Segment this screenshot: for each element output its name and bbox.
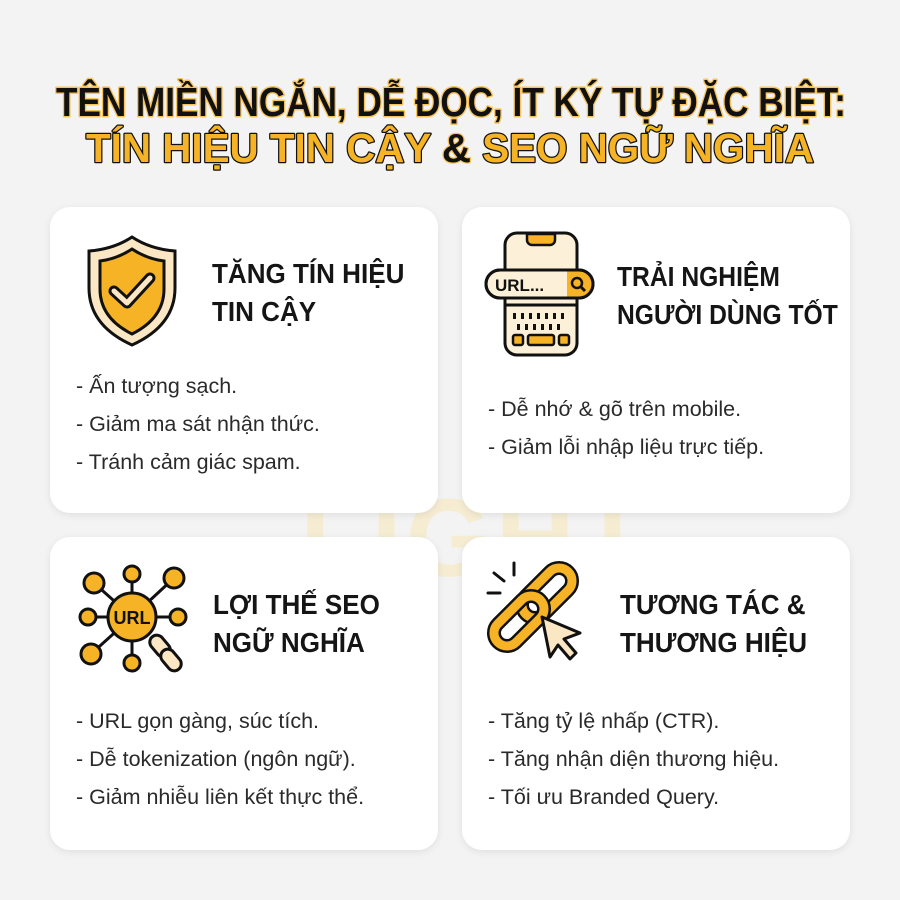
- icon: phone: URL...: [495, 276, 544, 295]
- watermark: LIGHT: [300, 477, 650, 600]
- icon: shield: [88, 235, 176, 347]
- bullets: - Ấn tượng sạch.: [76, 374, 237, 398]
- bullets: - Tránh cảm giác spam.: [76, 450, 301, 474]
- icon: URL network: URL: [114, 608, 150, 628]
- bullets: - Giảm lỗi nhập liệu trực tiếp.: [488, 435, 764, 459]
- panel: trust: [50, 207, 438, 513]
- heading: NGƯỜI DÙNG TỐT: [617, 299, 838, 330]
- bullets: - Tăng nhận diện thương hiệu.: [488, 747, 779, 771]
- heading: TRẢI NGHIỆM: [617, 261, 780, 292]
- heading: NGỮ NGHĨA: [213, 627, 365, 658]
- heading: LỢI THẾ SEO: [213, 589, 380, 620]
- heading: [617, 261, 838, 330]
- heading: [213, 589, 380, 658]
- panel: UX: [462, 207, 850, 513]
- heading: TĂNG TÍN HIỆU: [212, 258, 404, 289]
- bullets: - Giảm nhiễu liên kết thực thể.: [76, 785, 364, 809]
- heading: [212, 258, 404, 327]
- icon: phone: [484, 232, 594, 356]
- bullets: - Giảm ma sát nhận thức.: [76, 412, 320, 436]
- title: TÍN HIỆU TIN CẬY & SEO NGỮ NGHĨA: [86, 125, 814, 171]
- bullets: - URL gọn gàng, súc tích.: [76, 709, 319, 733]
- bullets: - Dễ nhớ & gõ trên mobile.: [488, 397, 741, 421]
- panel: SEO: [50, 537, 438, 850]
- title: [55, 78, 846, 171]
- bullets: - Tối ưu Branded Query.: [488, 785, 719, 809]
- bullets: [76, 709, 364, 809]
- bullets: [76, 374, 320, 474]
- bullets: [488, 397, 764, 459]
- heading: THƯƠNG HIỆU: [620, 627, 807, 658]
- icon: chain & cursor: [486, 561, 582, 661]
- heading: TƯƠNG TÁC &: [620, 589, 806, 620]
- heading: TIN CẬY: [212, 296, 316, 327]
- bullets: - Tăng tỷ lệ nhấp (CTR).: [488, 709, 719, 733]
- bullets: - Dễ tokenization (ngôn ngữ).: [76, 747, 356, 771]
- heading: [620, 589, 807, 658]
- icon: URL network: [78, 564, 188, 672]
- panel: engagement: [462, 537, 850, 850]
- bullets: [488, 709, 779, 809]
